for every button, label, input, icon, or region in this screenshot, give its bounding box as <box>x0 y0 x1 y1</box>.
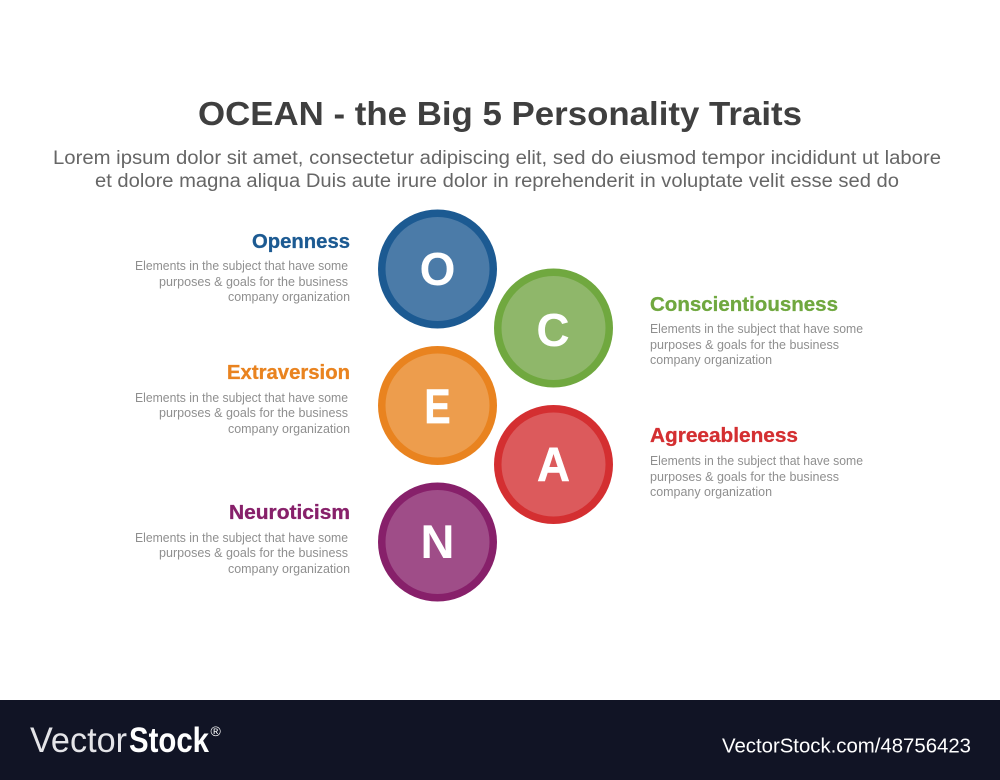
footer url: VectorStock.com/48756423 <box>722 734 971 758</box>
label: Extraversion: Extraversion <box>227 362 350 384</box>
subtitle: Lorem ipsum dolor sit amet, consectetur adipiscing elit, sed do eiusmod tempor incididunt ut labore <box>53 148 941 169</box>
label: Agreeableness: Agreeableness <box>650 425 798 447</box>
label: Openness: purposes & goals for the business <box>159 275 348 289</box>
label: Conscientiousness: Elements in the subject that have some <box>650 322 863 336</box>
circle: E <box>378 346 497 465</box>
label: Extraversion: purposes & goals for the business <box>159 406 348 420</box>
circle: A <box>494 405 613 524</box>
label: Openness <box>135 231 350 304</box>
footer logo: Stock <box>129 721 209 760</box>
circle: N: N <box>421 515 454 568</box>
footer logo: Vector <box>30 721 127 760</box>
label: Agreeableness: company organization <box>650 485 772 499</box>
circle: O: O <box>420 243 455 295</box>
label: Openness: Openness <box>252 231 350 253</box>
label: Conscientiousness <box>650 294 863 367</box>
label: Extraversion: Elements in the subject that have some <box>135 391 348 405</box>
label: Extraversion <box>135 362 350 436</box>
subtitle <box>53 148 941 192</box>
footer logo <box>30 721 209 760</box>
circle: A: A <box>537 439 570 492</box>
circle: C <box>494 268 613 388</box>
label: Agreeableness <box>650 425 863 499</box>
label: Conscientiousness: purposes & goals for the business <box>650 338 839 352</box>
subtitle: et dolore magna aliqua Duis aute irure dolor in reprehenderit in voluptate velit esse sed do <box>95 171 899 192</box>
label: Neuroticism <box>135 502 350 576</box>
label: Openness: Elements in the subject that have some <box>135 259 348 273</box>
label: Neuroticism: Elements in the subject that have some <box>135 531 348 545</box>
title: OCEAN - the Big 5 Personality Traits <box>198 95 802 132</box>
label: Extraversion: company organization <box>228 422 350 436</box>
label: Openness: company organization <box>228 290 350 304</box>
label: Agreeableness: Elements in the subject that have some <box>650 454 863 468</box>
label: Conscientiousness: Conscientiousness <box>650 294 838 316</box>
label: Conscientiousness: company organization <box>650 353 772 367</box>
label: Agreeableness: purposes & goals for the business <box>650 470 839 484</box>
label: Neuroticism: purposes & goals for the business <box>159 546 348 560</box>
footer bar <box>0 700 1000 780</box>
circle: N <box>378 482 497 602</box>
label: Neuroticism: company organization <box>228 562 350 576</box>
registered mark: ® <box>210 723 222 739</box>
circle: O <box>378 210 497 328</box>
circle: E: E <box>424 381 450 434</box>
circle: C: C <box>536 304 570 356</box>
label: Neuroticism: Neuroticism <box>229 502 350 524</box>
